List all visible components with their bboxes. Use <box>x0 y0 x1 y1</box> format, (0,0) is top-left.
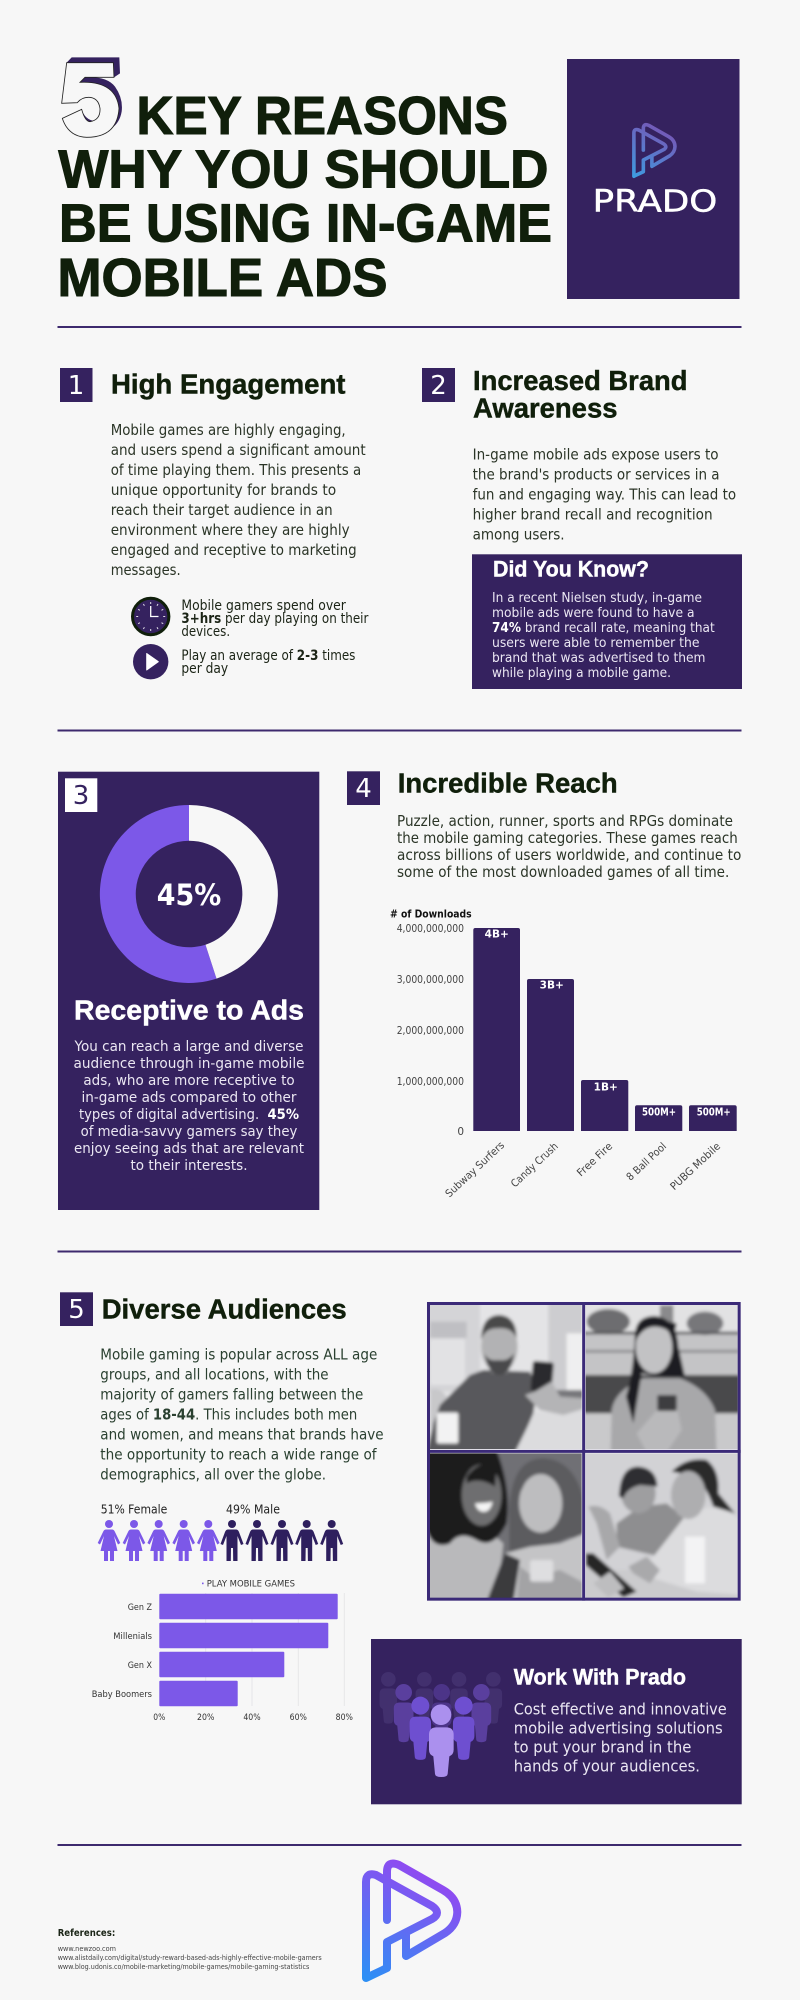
bars <box>473 928 737 1131</box>
axis labels: 20% <box>197 1713 214 1723</box>
category labels: Subway Surfers <box>443 1139 507 1200</box>
panel: Work With Prado <box>371 1639 742 1804</box>
text block: of media-savvy gamers say they <box>81 1124 298 1140</box>
photo: woman holding phone <box>582 1302 741 1452</box>
section 5: Diverse Audiences <box>60 1292 384 1723</box>
references: References: <box>58 1928 115 1939</box>
text block: groups, and all locations, with the <box>100 1365 329 1383</box>
icon: clock <box>132 598 169 635</box>
text block: fun and engaging way. This can lead to <box>473 485 736 503</box>
text block: mobile advertising solutions <box>514 1718 723 1737</box>
bars <box>159 1594 338 1706</box>
category labels: Candy Crush <box>509 1140 561 1190</box>
section 4: Incredible Reach <box>347 768 741 1200</box>
text block: some of the most downloaded games of all time. <box>397 863 729 881</box>
references: www.newzoo.com <box>58 1944 116 1953</box>
text block: demographics, all over the globe. <box>100 1465 326 1483</box>
icon: small Prado logo <box>634 125 675 176</box>
donut chart 45% <box>100 805 278 983</box>
pictogram: male figures <box>220 1520 343 1561</box>
bar chart: downloads <box>390 909 737 1200</box>
text block: the opportunity to reach a wide range of <box>100 1445 377 1463</box>
text block <box>100 1345 384 1483</box>
references: www.blog.udonis.co/mobile-marketing/mobile-games/mobile-gaming-statistics <box>58 1962 310 1971</box>
panel: section 3 Receptive to Ads <box>58 772 319 1210</box>
text block <box>473 445 736 543</box>
number badge 4 <box>347 771 380 805</box>
stat: time spent: 3+hrs per day playing on their <box>181 611 369 627</box>
heading: Incredible Reach <box>398 768 618 799</box>
text block: to put your brand in the <box>514 1737 691 1756</box>
text block: types of digital advertising. 45% <box>79 1107 299 1123</box>
axis labels: 60% <box>290 1713 307 1723</box>
text block: ads, who are more receptive to <box>83 1073 295 1089</box>
number badge 5: 5 <box>68 1295 85 1325</box>
y axis labels: 1,000,000,000 <box>397 1076 464 1088</box>
legend: PLAY MOBILE GAMES <box>207 1580 295 1590</box>
text block: majority of gamers falling between the <box>100 1385 363 1403</box>
callout text: brand that was advertised to them <box>492 650 706 666</box>
photo: man with phone and mug <box>427 1302 585 1452</box>
text block: Cost effective and innovative <box>514 1699 727 1718</box>
photo: two women laughing at phone <box>427 1450 585 1602</box>
title <box>58 86 552 308</box>
references: www.alistdaily.com/digital/study-reward-based-ads-highly-effective-mobile-gamers <box>58 1953 322 1962</box>
y axis labels: 4,000,000,000 <box>397 923 464 935</box>
photo: two women with tablet <box>582 1450 741 1602</box>
title: WHY YOU SHOULD <box>58 140 548 200</box>
category labels: Gen X <box>128 1661 152 1671</box>
y axis labels: 0 <box>457 1126 464 1138</box>
gender split labels <box>101 1501 280 1516</box>
text block: You can reach a large and diverse <box>74 1039 304 1055</box>
donut chart 45%: 45% <box>157 878 221 912</box>
text block: among users. <box>473 525 565 543</box>
callout text: 74% brand recall rate, meaning that <box>492 620 715 636</box>
wordmark: PRADO <box>593 185 717 220</box>
text block: unique opportunity for brands to <box>111 481 336 499</box>
value labels: 4B+ <box>485 929 509 941</box>
stat: time spent: Mobile gamers spend over <box>181 598 346 614</box>
heading: Work With Prado <box>514 1664 686 1689</box>
category labels: Baby Boomers <box>92 1690 152 1700</box>
title: MOBILE ADS <box>58 248 388 308</box>
text block: the brand's products or services in a <box>473 465 720 483</box>
text block: In-game mobile ads expose users to <box>473 445 719 463</box>
text block: ages of 18-44. This includes both men <box>100 1405 357 1423</box>
value labels: 500M+ <box>697 1107 731 1119</box>
title: KEY REASONS <box>136 86 508 146</box>
section 2: Increased Brand Awareness <box>422 365 742 689</box>
icon: 3D number five <box>62 57 122 137</box>
number badge 3: 3 <box>73 781 89 811</box>
number badge 2: 2 <box>430 371 447 401</box>
heading: Receptive to Ads <box>74 994 304 1025</box>
text block: higher brand recall and recognition <box>473 505 713 523</box>
value labels: 1B+ <box>594 1082 618 1094</box>
text block: enjoy seeing ads that are relevant <box>74 1141 304 1157</box>
text block: Mobile gaming is popular across ALL age <box>100 1345 377 1363</box>
callout text: users were able to remember the <box>492 635 700 651</box>
text block: audience through in-game mobile <box>74 1056 305 1072</box>
section 1: High Engagement <box>60 368 369 679</box>
axis title: # of Downloads <box>390 909 472 921</box>
callout text: while playing a mobile game. <box>492 665 671 681</box>
number badge 5 <box>60 1292 93 1326</box>
value labels: 3B+ <box>540 980 564 992</box>
text block: engaged and receptive to marketing <box>111 541 357 559</box>
number badge 2 <box>422 368 455 402</box>
references <box>58 1928 322 1971</box>
heading: Increased Brand <box>473 365 688 396</box>
text block: hands of your audiences. <box>514 1756 700 1775</box>
text block: and women, and means that brands have <box>100 1425 384 1443</box>
callout text: In a recent Nielsen study, in-game <box>492 590 702 606</box>
stat: play frequency <box>181 648 355 677</box>
callout: Did You Know <box>472 554 742 689</box>
heading: Awareness <box>473 392 618 424</box>
category labels: Free Fire <box>575 1140 615 1179</box>
text block: and users spend a significant amount <box>111 441 366 459</box>
category labels: Gen Z <box>128 1603 152 1613</box>
text block: the mobile gaming categories. These games reach <box>397 829 738 847</box>
pictogram: female figures <box>98 1520 220 1561</box>
category labels: PUBG Mobile <box>668 1140 723 1193</box>
category labels <box>443 1139 723 1200</box>
axis labels: 0% <box>153 1713 165 1723</box>
number badge 1: 1 <box>68 371 84 401</box>
text block: Mobile games are highly engaging, <box>111 421 346 439</box>
bar chart: play mobile games by generation <box>92 1580 353 1723</box>
text block: to their interests. <box>130 1158 248 1174</box>
heading: Diverse Audiences <box>102 1294 347 1325</box>
panel: Prado logo block <box>567 59 740 299</box>
heading <box>473 365 688 424</box>
value labels: 500M+ <box>642 1107 676 1119</box>
stat: time spent <box>181 598 369 640</box>
text block: environment where they are highly <box>111 521 350 539</box>
text block <box>514 1699 727 1775</box>
icon: Prado logo <box>366 1864 457 1978</box>
axis labels: 40% <box>243 1713 261 1723</box>
value labels <box>485 929 731 1119</box>
number badge 4: 4 <box>355 774 372 804</box>
text block: in-game ads compared to other <box>82 1090 297 1106</box>
callout text <box>492 590 715 681</box>
gender split labels: 49% Male <box>226 1501 280 1516</box>
text block <box>74 1039 305 1174</box>
stat: time spent: devices. <box>181 624 230 640</box>
category labels: 8 Ball Pool <box>624 1140 669 1183</box>
y axis labels: 2,000,000,000 <box>397 1025 464 1037</box>
y axis labels <box>397 923 464 1138</box>
text block <box>397 812 741 881</box>
text block: across billions of users worldwide, and continue to <box>397 846 741 864</box>
text block: Puzzle, action, runner, sports and RPGs dominate <box>397 812 733 830</box>
stat: play frequency: per day <box>181 661 228 677</box>
text block <box>111 421 366 579</box>
callout text: mobile ads were found to have a <box>492 605 694 621</box>
text block: messages. <box>111 561 181 579</box>
title: BE USING IN-GAME <box>59 194 552 254</box>
callout heading: Did You Know? <box>493 557 649 582</box>
y axis labels: 3,000,000,000 <box>397 974 464 986</box>
icon: crowd of people <box>380 1672 502 1777</box>
axis labels: 80% <box>336 1713 353 1723</box>
text block: of time playing them. This presents a <box>111 461 361 479</box>
number badge 1 <box>60 368 92 402</box>
number badge 3 <box>65 778 97 812</box>
axis labels <box>153 1713 353 1723</box>
photo grid: people using phones <box>427 1302 741 1602</box>
category labels <box>92 1603 152 1700</box>
icon: play button <box>133 644 168 679</box>
gender split labels: 51% Female <box>101 1501 168 1516</box>
stat: play frequency: Play an average of 2-3 times <box>181 648 355 664</box>
category labels: Millenials <box>113 1632 152 1642</box>
text block: reach their target audience in an <box>111 501 333 519</box>
heading: High Engagement <box>111 368 346 400</box>
